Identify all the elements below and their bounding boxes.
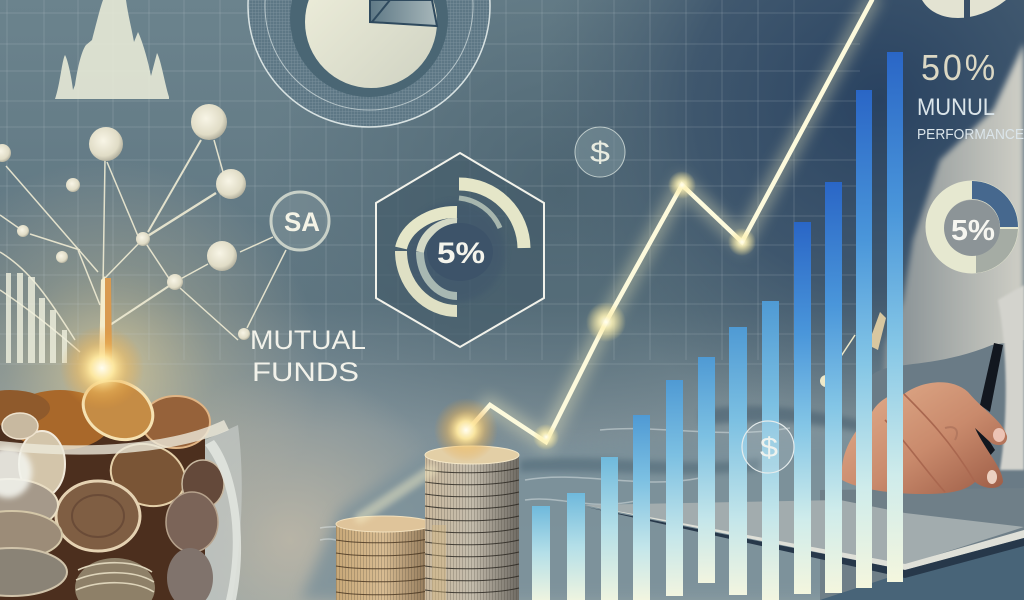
SA node (271, 192, 329, 250)
dollar badge on bars (742, 421, 794, 473)
trunk (99, 278, 112, 365)
tree of nodes (0, 104, 286, 365)
right column labels: MUNUL (917, 94, 995, 121)
table surface (300, 406, 860, 600)
rising line (360, 0, 872, 518)
left mini bars (6, 273, 67, 363)
line glow points (434, 171, 756, 462)
donut chart top centre (248, 0, 490, 127)
person shirt (860, 43, 1024, 500)
mutual funds label: MUTUAL (250, 325, 366, 355)
mutual funds label (250, 325, 366, 387)
bar chart (532, 52, 903, 600)
top right donut fragment (922, 0, 1006, 18)
hexagon gauge (376, 153, 544, 347)
hexagon gauge: 5% (437, 237, 485, 270)
mountain chart top left (55, 0, 169, 99)
right column labels (917, 47, 1024, 143)
right donut chart: 5% (951, 215, 995, 247)
mutual funds label: FUNDS (252, 357, 359, 387)
jar glass (0, 420, 229, 455)
right donut chart (935, 181, 1018, 273)
hand and pen (842, 343, 1007, 494)
dollar badge: $ (590, 137, 610, 169)
jar of coins (0, 369, 242, 600)
right column labels: 50% (921, 47, 998, 88)
dollar badge (575, 127, 625, 177)
coin stacks (336, 446, 519, 600)
nails (993, 428, 1005, 442)
SA node: SA (284, 207, 320, 237)
right stack (425, 446, 519, 600)
desk and tablet (584, 488, 1024, 600)
pen (980, 343, 1003, 412)
left stack (336, 516, 432, 600)
dollar badge on bars: $ (760, 432, 778, 463)
pie wedge (370, 0, 437, 26)
jar glow (60, 326, 144, 410)
node line on bars (801, 253, 855, 391)
